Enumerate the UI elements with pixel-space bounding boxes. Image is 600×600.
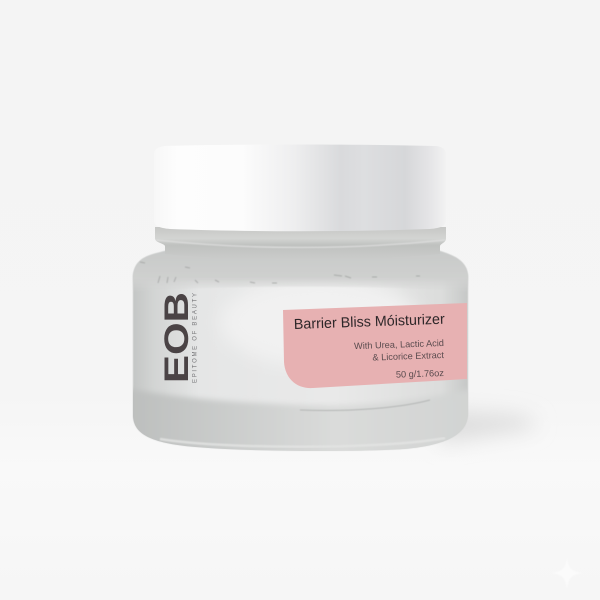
- jar body: [133, 251, 468, 451]
- base glass rim: [160, 438, 445, 447]
- label text: [294, 312, 445, 380]
- brand logo EOB: EOB: [158, 292, 196, 383]
- product name: Barrier Bliss Móisturizer: [294, 312, 445, 333]
- condensation specks: [140, 262, 420, 283]
- ingredients: With Urea, Lactic Acid: [354, 338, 444, 351]
- jar: [125, 144, 476, 460]
- cream highlight: [220, 277, 420, 367]
- pink label: [283, 303, 467, 388]
- brand tagline: EPITOME OF BEAUTY: [192, 293, 198, 383]
- cream line: [300, 400, 430, 411]
- cast shadow: [440, 410, 536, 444]
- sparkle watermark: [552, 558, 582, 588]
- jar neck: [155, 227, 446, 260]
- product photo scene: [132, 144, 526, 451]
- lid: [154, 144, 446, 231]
- frosted base band: [133, 388, 468, 451]
- net weight: 50 g/1.76oz: [396, 368, 444, 380]
- label text: & Licorice Extract: [372, 350, 445, 362]
- neck thread line: [156, 240, 445, 248]
- shoulder band: [133, 251, 468, 292]
